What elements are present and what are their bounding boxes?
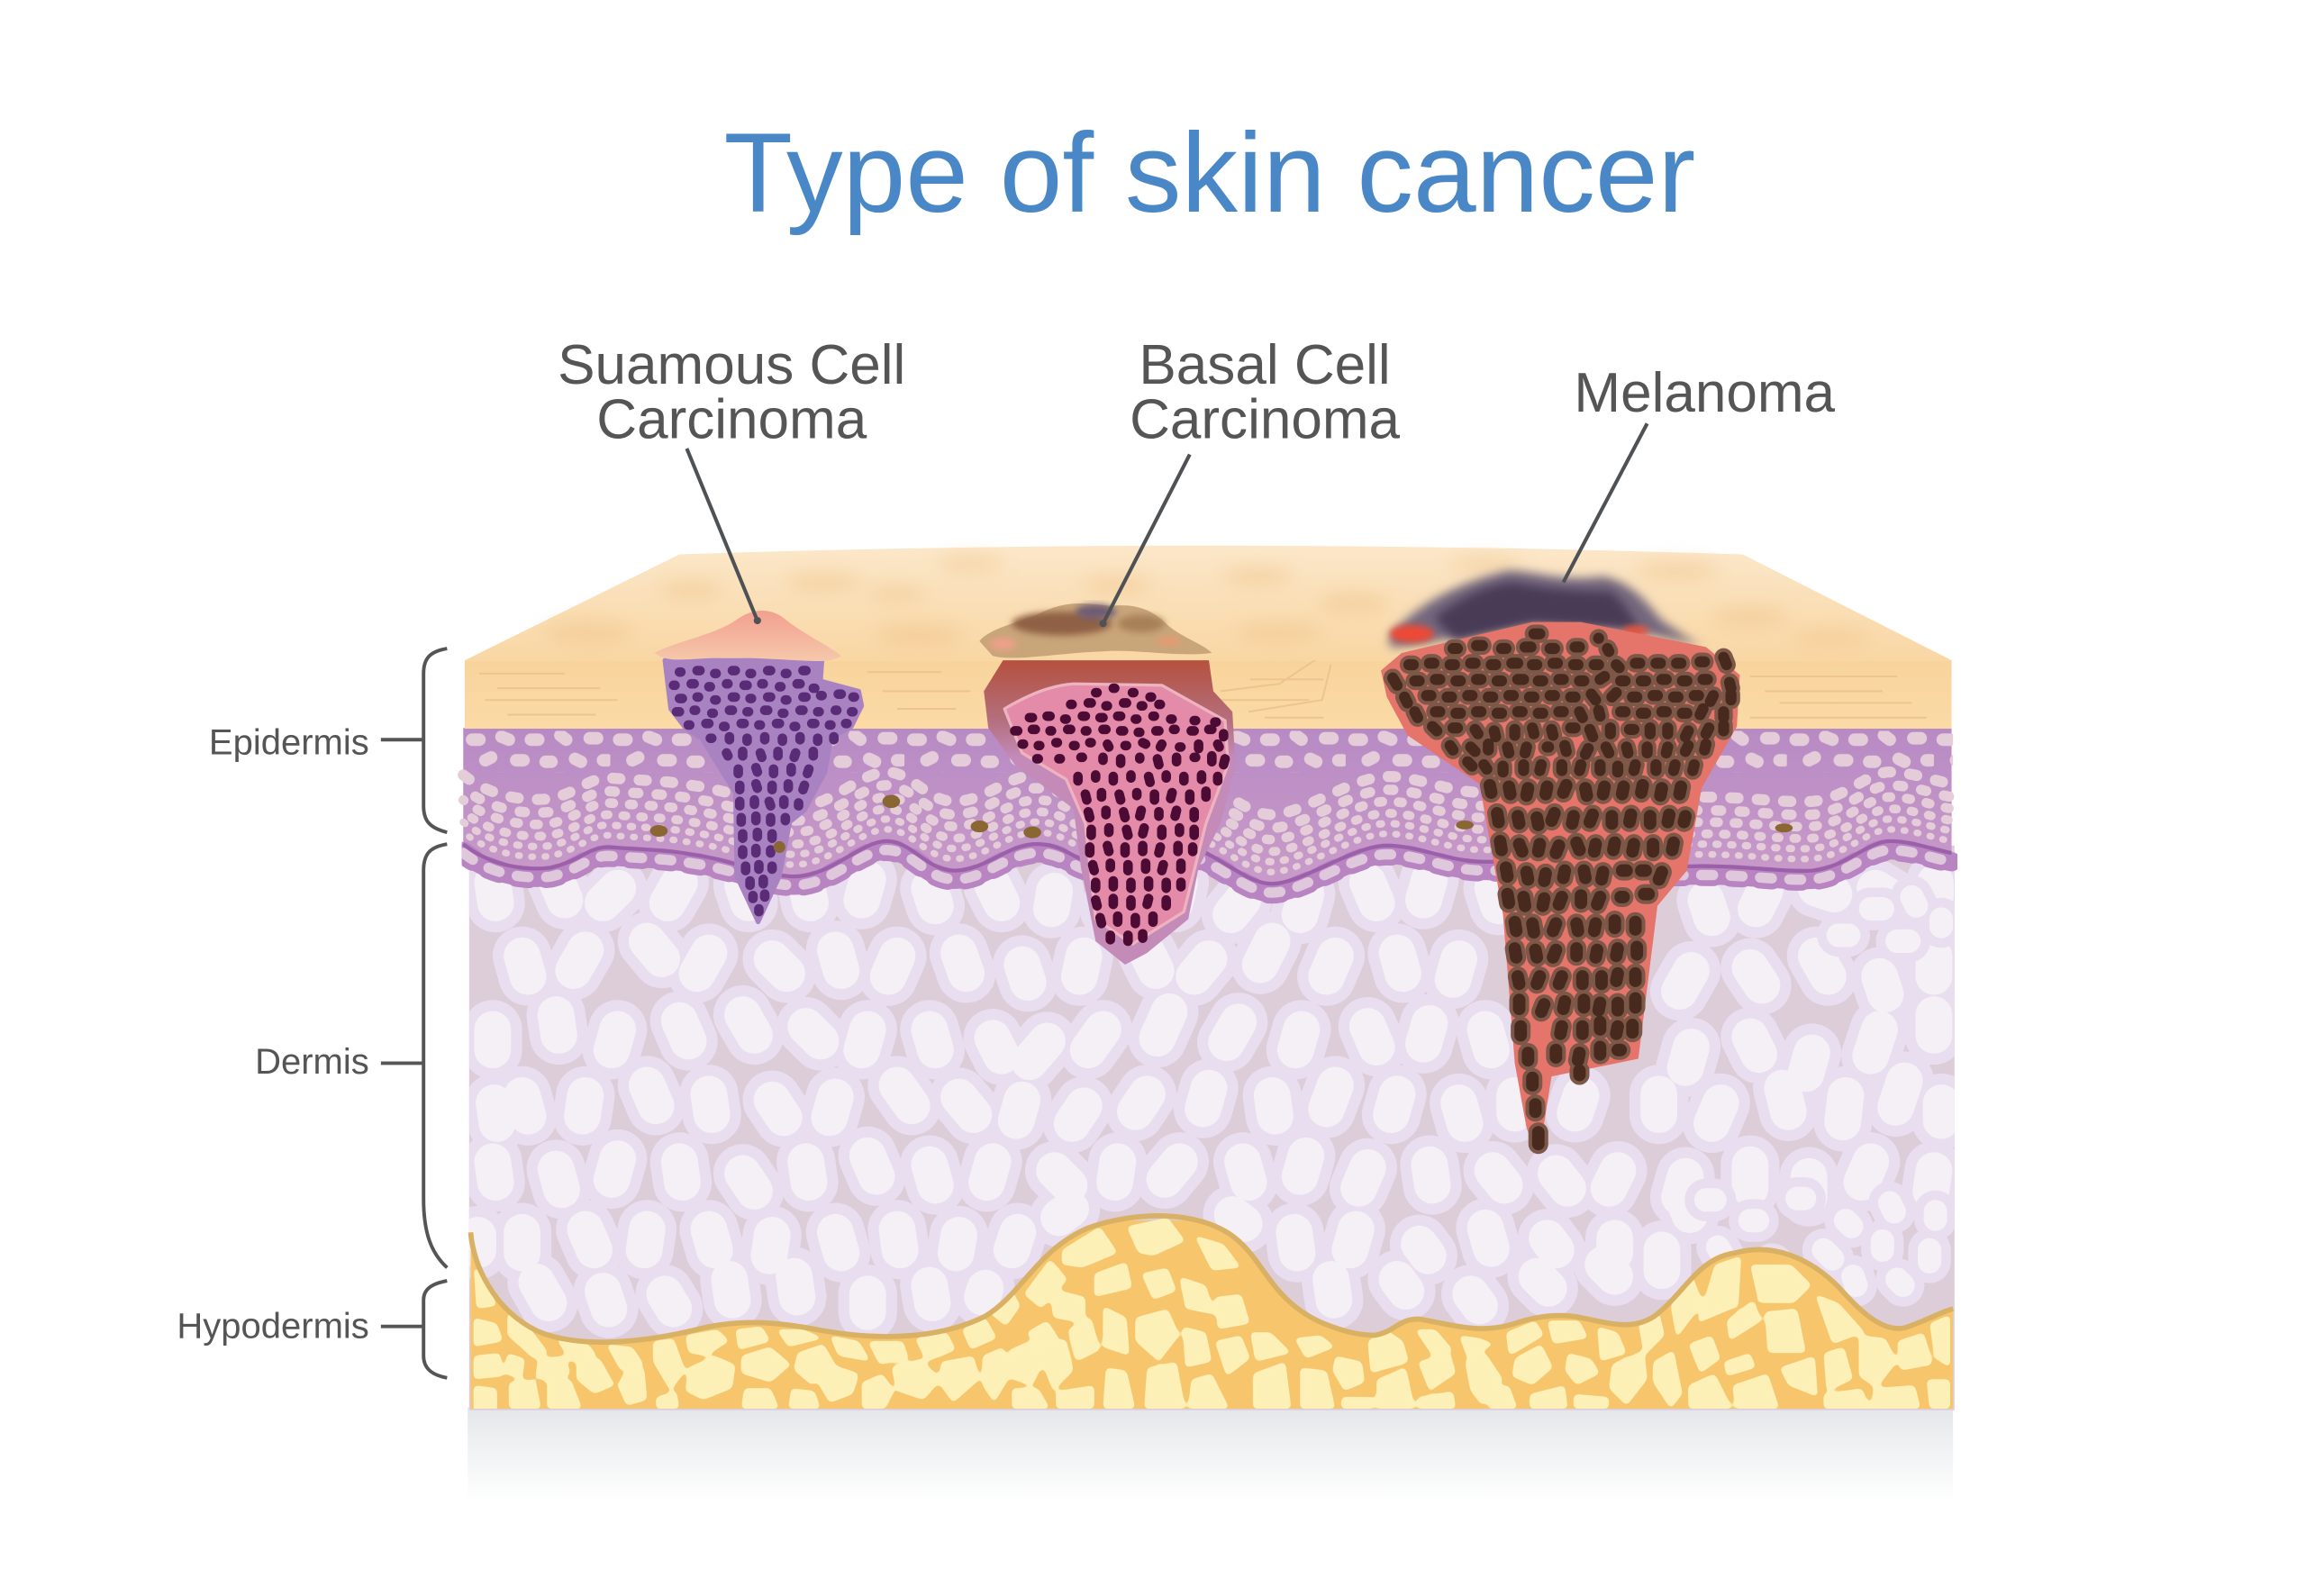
tumour surface lump xyxy=(979,603,1212,657)
label: hypodermis xyxy=(177,1281,447,1378)
panel: front skin band xyxy=(465,655,1952,729)
label: basal cell carcinoma: Basal Cell xyxy=(1139,334,1391,396)
label: basal cell carcinoma: Carcinoma xyxy=(1130,389,1401,451)
tumour surface lump xyxy=(655,611,841,661)
panel: hypodermis fat layer xyxy=(468,1216,1956,1411)
label: squamous cell carcinoma: Suamous Cell xyxy=(558,334,905,396)
label: hypodermis: Hypodermis xyxy=(177,1307,369,1347)
label: basal cell carcinoma xyxy=(1130,334,1401,451)
panel: top skin surface xyxy=(465,546,1952,660)
label: squamous cell carcinoma xyxy=(558,334,905,451)
skin cross-section diagram xyxy=(463,546,1956,1501)
tumour body xyxy=(665,660,862,922)
label: dermis: Dermis xyxy=(255,1042,369,1082)
label: dermis xyxy=(255,844,447,1267)
label: epidermis: Epidermis xyxy=(209,723,369,763)
bottom shadow xyxy=(468,1407,1953,1501)
label: squamous cell carcinoma: Carcinoma xyxy=(596,389,867,451)
leader line: squamous xyxy=(686,449,761,624)
tumour pink core xyxy=(1004,684,1228,944)
leader line: basal xyxy=(1099,455,1190,627)
panel: epidermis purple layer xyxy=(463,728,1953,893)
title: Type of skin cancer xyxy=(723,110,1695,236)
basal cell tumour xyxy=(979,603,1235,965)
tumour nuclei xyxy=(1393,634,1731,1144)
pigment cells xyxy=(650,794,1793,853)
tumour surface lump xyxy=(1390,571,1703,647)
label: epidermis xyxy=(209,648,447,832)
leader line: melanoma xyxy=(1564,423,1648,583)
tumour nuclei xyxy=(1015,688,1225,941)
label: melanoma: Melanoma xyxy=(1574,362,1836,424)
tumour nuclei xyxy=(674,671,855,911)
panel: dermis layer xyxy=(469,846,1955,1410)
squamous cell tumour xyxy=(655,611,862,922)
tumour body xyxy=(984,660,1235,965)
melanoma tumour xyxy=(1381,571,1739,1155)
tumour body xyxy=(1381,622,1739,1155)
